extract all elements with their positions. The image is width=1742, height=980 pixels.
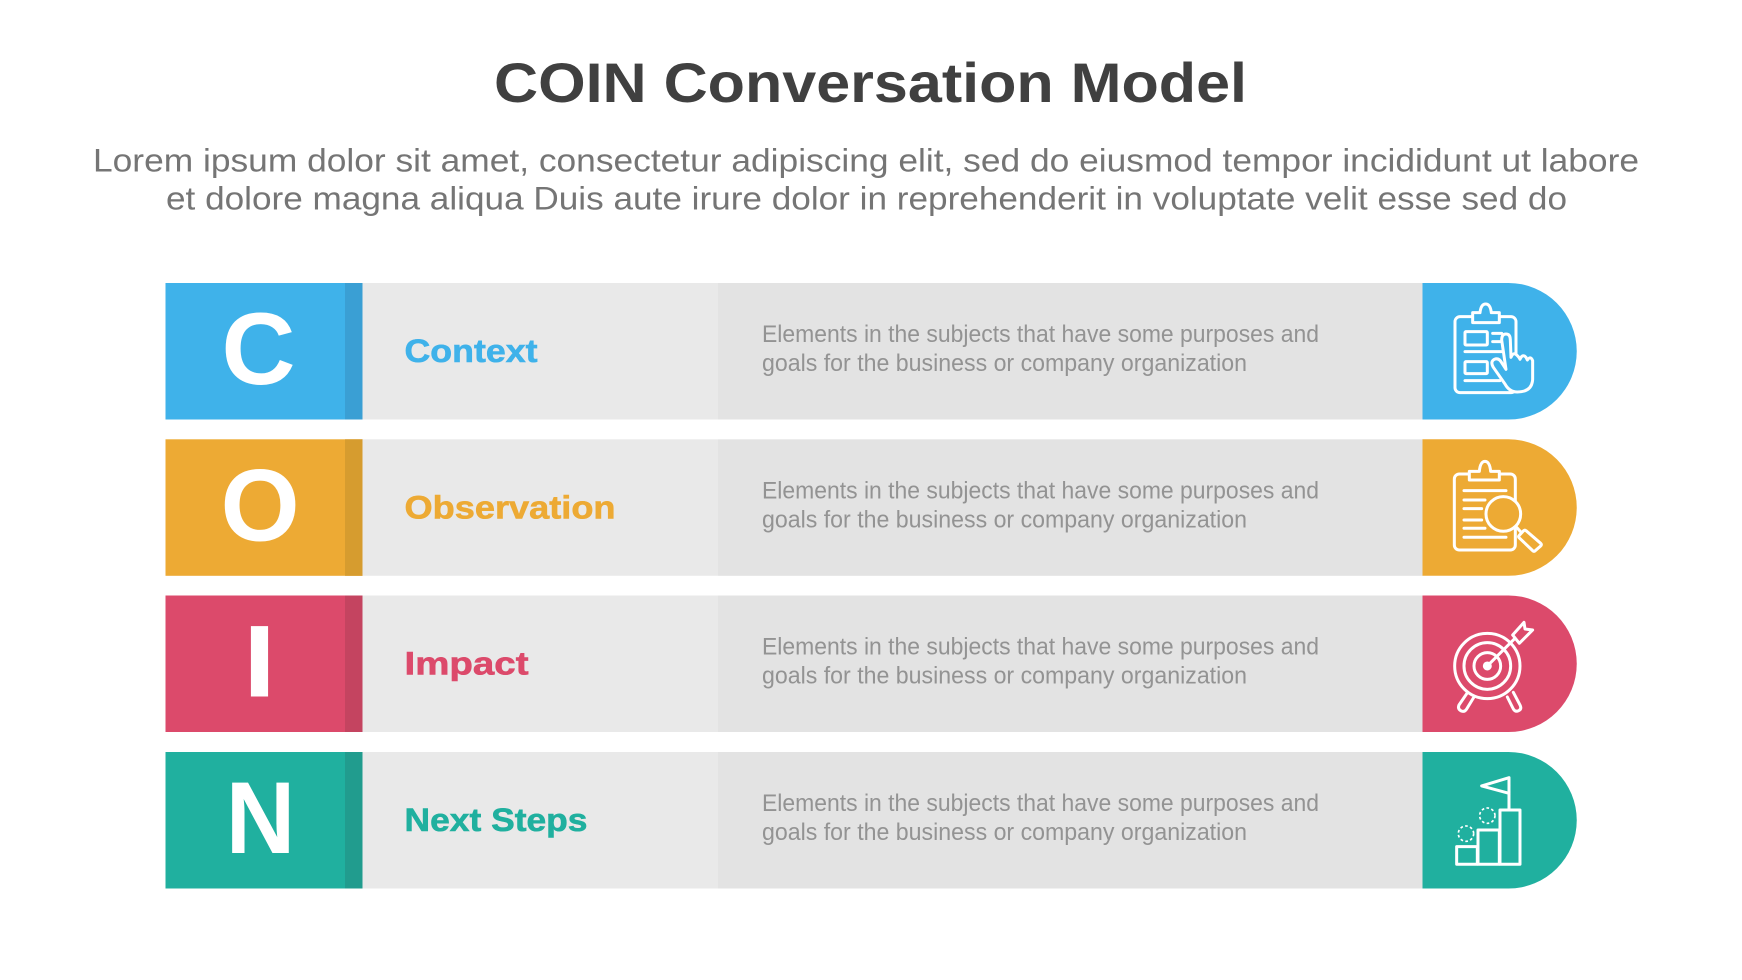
letter tile N — [166, 752, 362, 888]
description: Observation — [762, 477, 1319, 533]
panel: observation row — [166, 439, 1577, 576]
description: Context — [762, 321, 1319, 377]
description: Context: goals for the business or company organization — [762, 350, 1247, 377]
letter tile N: N — [226, 761, 295, 875]
description: Observation: goals for the business or company organization — [762, 506, 1247, 533]
heading: Next Steps: Next Steps — [404, 802, 588, 838]
icon tab: target with arrow — [1422, 596, 1577, 732]
icon tab: clipboard with magnifier — [1422, 439, 1577, 576]
subtitle text block — [93, 142, 1639, 216]
heading: Context: Context — [404, 333, 538, 369]
description: Impact — [762, 634, 1319, 690]
description: Next Steps: Elements in the subjects that have some purposes and — [762, 790, 1319, 817]
letter tile C: C — [222, 292, 296, 406]
letter tile I — [166, 596, 362, 732]
description: Observation: Elements in the subjects that have some purposes and — [762, 477, 1319, 504]
letter tile O: O — [221, 448, 300, 562]
title: COIN Conversation Model — [494, 51, 1247, 114]
description: Next Steps: goals for the business or company organization — [762, 819, 1247, 846]
heading: Impact: Impact — [404, 646, 529, 682]
subtitle text block: Lorem ipsum dolor sit amet, consectetur adipiscing elit, sed do eiusmod tempor incididunt ut labore — [93, 142, 1639, 178]
description: Impact: goals for the business or company organization — [762, 662, 1247, 690]
letter tile O — [166, 439, 362, 576]
description: Context: Elements in the subjects that have some purposes and — [762, 321, 1319, 348]
description: Next Steps — [762, 790, 1319, 846]
panel: next steps row — [166, 752, 1577, 888]
panel: context row — [166, 283, 1577, 420]
letter tile C — [166, 283, 362, 420]
subtitle text block: et dolore magna aliqua Duis aute irure dolor in reprehenderit in voluptate velit esse sed do — [166, 180, 1567, 216]
icon tab: steps with flag — [1422, 752, 1577, 888]
heading: Observation: Observation — [404, 489, 616, 525]
letter tile I: I — [243, 604, 276, 718]
panel: impact row — [166, 596, 1577, 732]
icon tab: clipboard with hand — [1422, 283, 1577, 420]
description: Impact: Elements in the subjects that have some purposes and — [762, 634, 1319, 660]
